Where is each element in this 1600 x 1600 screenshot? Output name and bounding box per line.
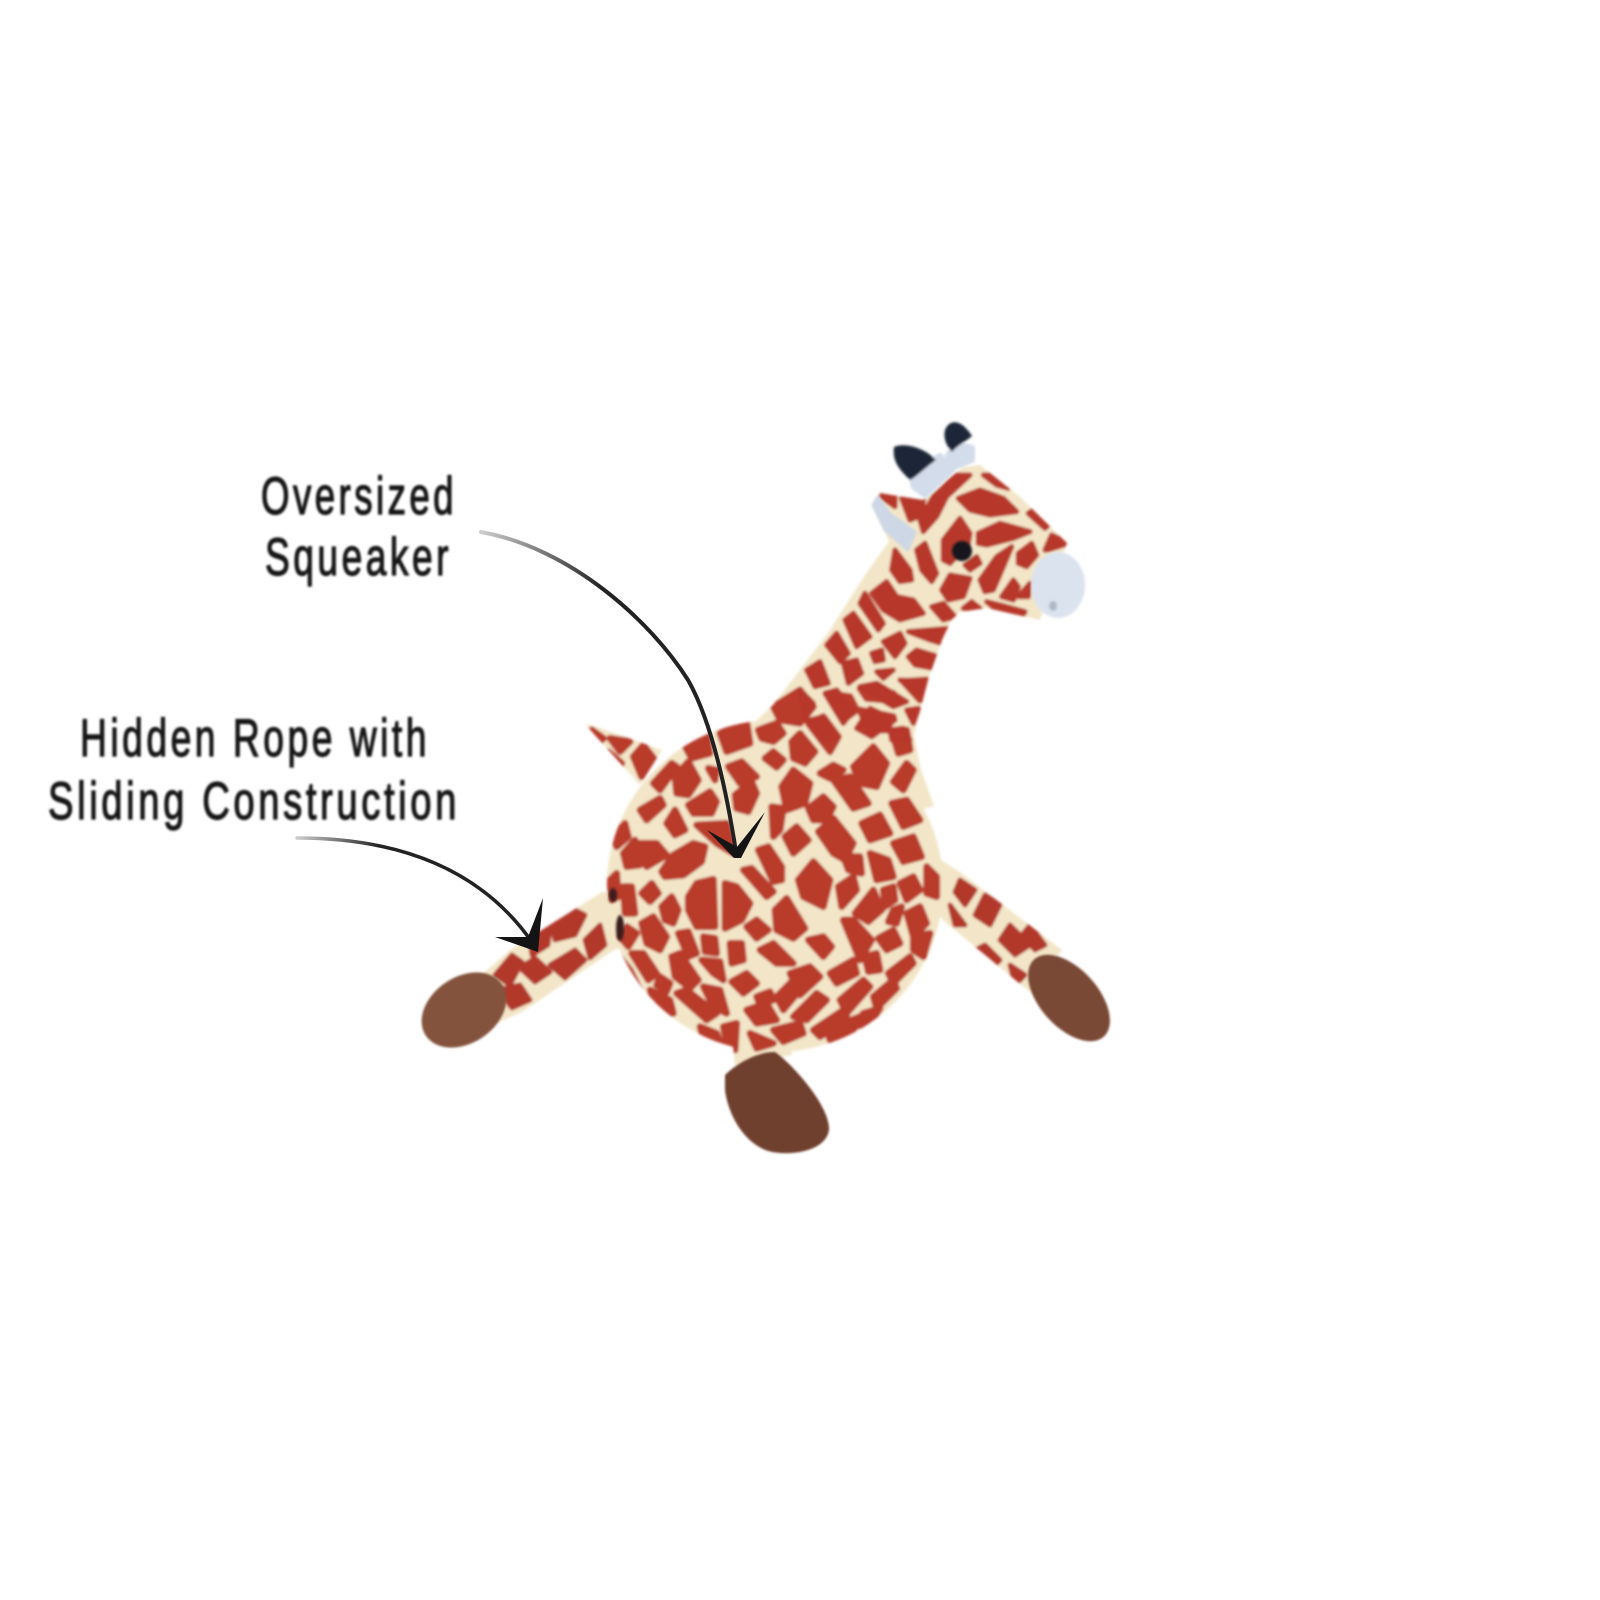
patterned hide: body, neck, head, tail and legs	[483, 464, 1068, 1066]
arrow: rope pointer	[297, 838, 543, 952]
head details	[873, 422, 1085, 618]
label: hidden rope with sliding construction: Sliding Construction	[48, 772, 460, 831]
body and tail patches	[592, 680, 937, 1050]
illustration: giraffe plush toy	[420, 420, 1112, 1155]
label: hidden rope with sliding construction	[48, 709, 460, 831]
label: oversized squeaker: Squeaker	[265, 528, 452, 587]
arrow: squeaker pointer	[481, 532, 765, 858]
icon: nostril	[1049, 601, 1057, 611]
bottom foot	[725, 1052, 829, 1153]
leg patches	[495, 880, 1045, 1008]
seam shadows where left leg joins body	[609, 888, 624, 941]
icon: horn stalks	[910, 444, 972, 495]
icon: dark horn tips	[894, 422, 972, 480]
label: oversized squeaker: Oversized	[261, 467, 457, 526]
icon: eye	[952, 541, 972, 561]
icon: muzzle	[1031, 552, 1085, 618]
left foot	[407, 957, 521, 1063]
label: hidden rope with sliding construction: Hidden Rope with	[80, 709, 430, 768]
icon: ear	[873, 497, 915, 550]
head and neck patches	[800, 475, 1068, 740]
label: oversized squeaker	[261, 467, 457, 587]
right foot	[1013, 940, 1125, 1056]
